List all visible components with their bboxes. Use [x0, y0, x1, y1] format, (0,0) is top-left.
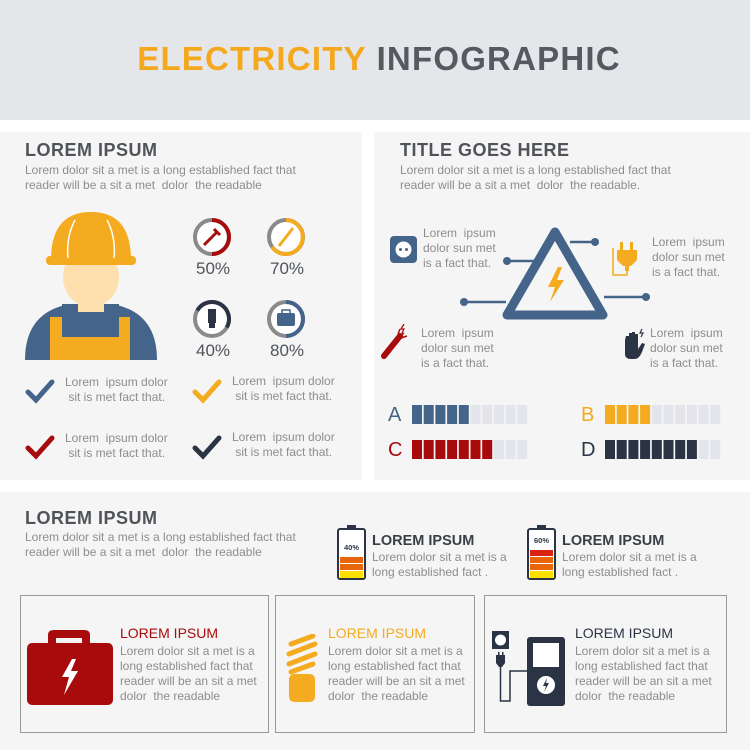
checklist: Lorem ipsum dolor: [232, 430, 335, 444]
bar: A: [388, 404, 528, 426]
heading: LOREM IPSUM: [25, 140, 158, 160]
battery 60%: long established fact .: [562, 565, 678, 579]
text block: reader will be a sit a met dolor the readable.: [400, 178, 640, 192]
icon: hand: [625, 328, 645, 359]
bar: A: A: [388, 404, 401, 426]
text block: [400, 163, 671, 192]
donut: 50%: 50%: [196, 259, 230, 278]
checklist: sit is met fact that.: [235, 389, 332, 403]
battery 60%: [527, 525, 697, 580]
donut: 70%: 70%: [270, 259, 304, 278]
box: toolbox: dolor the readable: [120, 689, 220, 703]
text block: reader will be a sit a met dolor the readable: [25, 545, 262, 559]
box: charger: long established fact that: [575, 659, 708, 673]
title: ELECTRICITY INFOGRAPHIC: [137, 40, 621, 77]
checklist: sit is met fact that.: [68, 446, 165, 460]
text: socket: dolor sun met: [423, 241, 496, 255]
icon: charger: [492, 631, 565, 706]
battery 40%: [337, 525, 507, 580]
box: toolbox: Lorem dolor sit a met is a: [120, 644, 255, 658]
donut: 40%: 40%: [196, 341, 230, 360]
box: bulb: dolor the readable: [328, 689, 428, 703]
text: hand: dolor sun met: [650, 341, 723, 355]
battery 40%: Lorem dolor sit a met is a: [372, 550, 507, 564]
donut: 50%: [193, 218, 231, 278]
icon: plug: [612, 242, 637, 276]
bar: D: [581, 439, 720, 461]
checklist: [26, 374, 335, 460]
text: plug: dolor sun met: [652, 250, 725, 264]
icon: bulb: [286, 634, 318, 702]
text: wire: is a fact that.: [421, 356, 489, 370]
text: wire: Lorem ipsum: [421, 326, 494, 340]
box: bulb: [275, 595, 475, 733]
battery 40%: LOREM IPSUM: [372, 533, 474, 549]
battery 60%: 60%: [534, 536, 549, 545]
box: toolbox: LOREM IPSUM: [120, 625, 218, 641]
text: socket: [423, 226, 496, 270]
text: plug: [652, 235, 725, 279]
box: charger: dolor the readable: [575, 689, 675, 703]
text block: [25, 530, 296, 559]
text: hand: [650, 326, 723, 370]
panel: bottom: [0, 492, 750, 750]
heading: LOREM IPSUM: [25, 508, 158, 528]
icon: broken wire: [381, 324, 408, 359]
text block: Lorem dolor sit a met is a long established fact that: [400, 163, 671, 177]
checklist: sit is met fact that.: [235, 445, 332, 459]
text: wire: dolor sun met: [421, 341, 494, 355]
battery 60%: LOREM IPSUM: [562, 533, 664, 549]
box: charger: reader will be an sit a met: [575, 674, 712, 688]
text block: Lorem dolor sit a met is a long established fact that: [25, 530, 296, 544]
box: charger: Lorem dolor sit a met is a: [575, 644, 710, 658]
bar: B: [581, 404, 720, 426]
text: hand: Lorem ipsum: [650, 326, 723, 340]
text: socket: Lorem ipsum: [423, 226, 496, 240]
text block: [25, 163, 296, 192]
icon: toolbox: [27, 630, 113, 705]
text block: Lorem dolor sit a met is a long established fact that: [25, 163, 296, 177]
checklist: Lorem ipsum dolor: [65, 431, 168, 445]
heading: TITLE GOES HERE: [400, 140, 570, 160]
text: plug: Lorem ipsum: [652, 235, 725, 249]
box: bulb: LOREM IPSUM: [328, 625, 426, 641]
bar: C: [388, 439, 528, 461]
panel: title goes here: [374, 132, 750, 480]
battery 40%: long established fact .: [372, 565, 488, 579]
box: toolbox: reader will be an sit a met: [120, 674, 257, 688]
donut: 80%: [267, 300, 305, 360]
panel: worker: [0, 132, 362, 480]
bar: D: D: [581, 439, 595, 461]
header band: [0, 0, 750, 120]
box: charger: LOREM IPSUM: [575, 625, 673, 641]
donut: 80%: 80%: [270, 341, 304, 360]
text: plug: is a fact that.: [652, 265, 720, 279]
icon: socket: [390, 236, 417, 263]
battery 60%: Lorem dolor sit a met is a: [562, 550, 697, 564]
box: bulb: long established fact that: [328, 659, 461, 673]
bar: B: B: [581, 404, 594, 426]
text: hand: is a fact that.: [650, 356, 718, 370]
checklist: Lorem ipsum dolor: [232, 374, 335, 388]
icon: warning triangle: [460, 228, 650, 320]
icon: worker: [25, 212, 157, 360]
checklist: Lorem ipsum dolor: [65, 375, 168, 389]
donut: 40%: [193, 300, 232, 360]
text block: reader will be a sit a met dolor the readable: [25, 178, 262, 192]
box: toolbox: [20, 595, 269, 733]
box: charger: [484, 595, 727, 733]
donut: 70%: [267, 218, 305, 278]
checklist: sit is met fact that.: [68, 390, 165, 404]
text: wire: [421, 326, 494, 370]
box: bulb: Lorem dolor sit a met is a: [328, 644, 463, 658]
box: bulb: reader will be an sit a met: [328, 674, 465, 688]
bar: C: C: [388, 439, 402, 461]
text: socket: is a fact that.: [423, 256, 491, 270]
box: toolbox: long established fact that: [120, 659, 253, 673]
battery 40%: 40%: [344, 543, 359, 552]
